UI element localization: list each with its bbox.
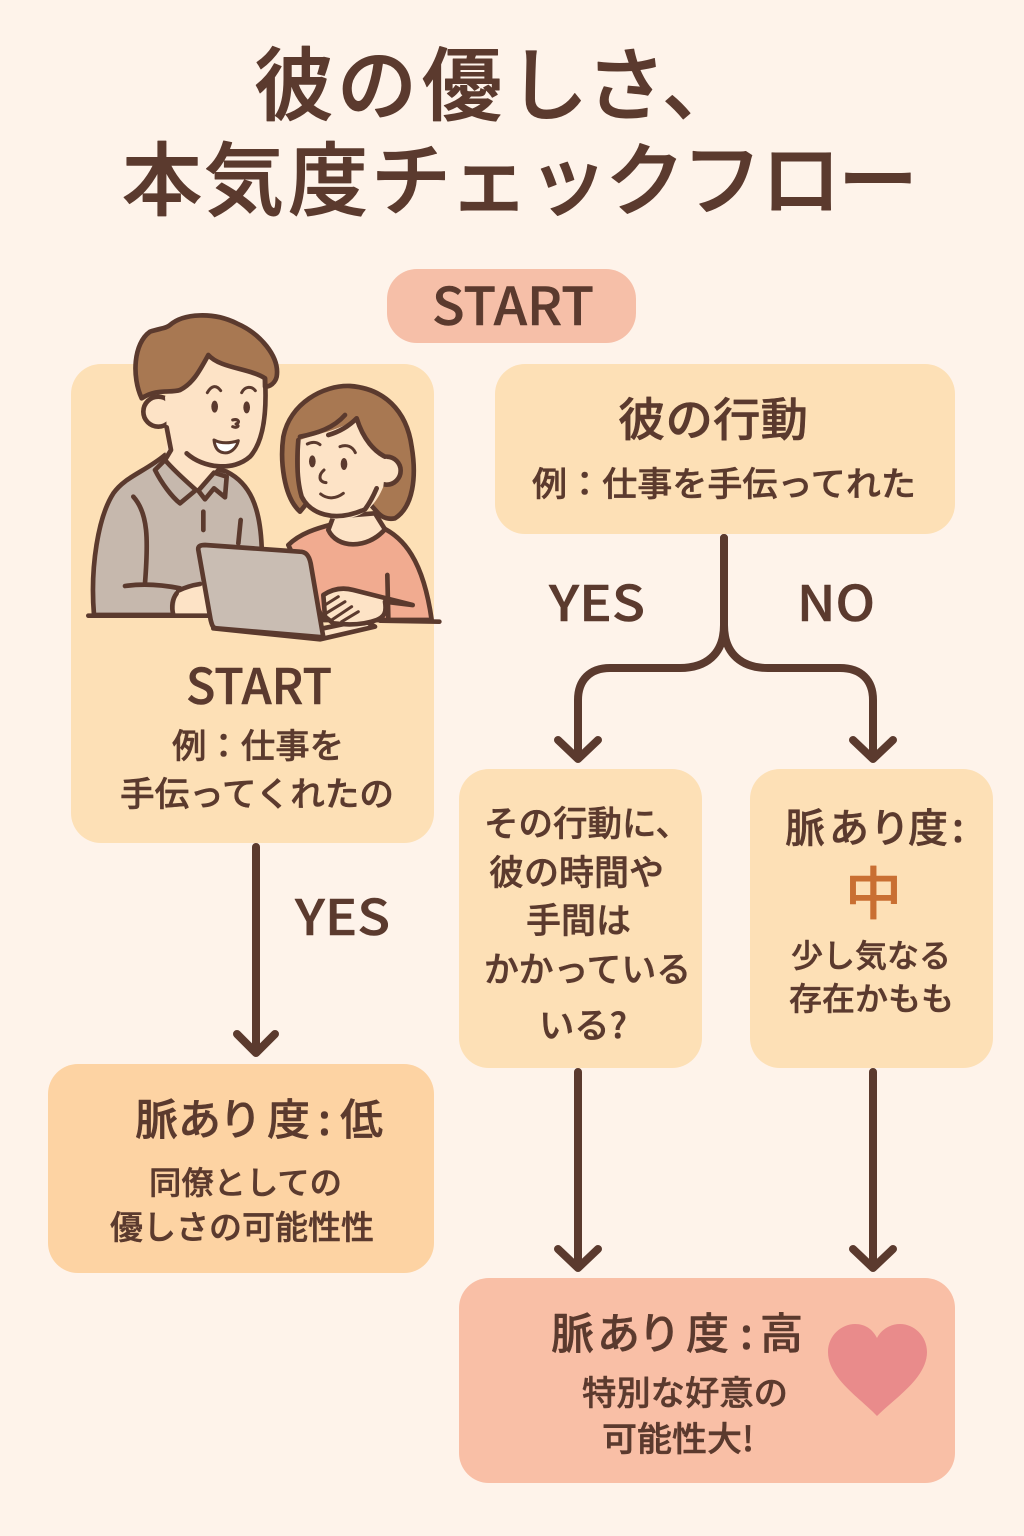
panel: low xyxy=(48,1064,434,1273)
label: no: NO xyxy=(797,565,875,636)
panel: high xyxy=(459,1278,955,1483)
label: left yes: YES xyxy=(294,879,390,950)
panel: left start box xyxy=(71,364,434,843)
woman face xyxy=(300,418,387,519)
left box label xyxy=(120,648,394,816)
title: 本気度チェックフロー xyxy=(122,117,918,233)
left box label: START xyxy=(186,648,332,719)
man face xyxy=(165,357,266,466)
woman body xyxy=(288,524,432,620)
left box label: 例：仕事を xyxy=(172,719,344,768)
left box label: 手伝ってくれたの xyxy=(120,767,394,816)
title xyxy=(122,22,918,233)
panel: low: 脈あり度:低 xyxy=(135,1086,383,1148)
label: yes: YES xyxy=(548,565,645,636)
woman neck xyxy=(328,513,385,544)
panel: question: かかっている xyxy=(484,942,691,993)
arrow: branch no xyxy=(724,538,893,759)
panel: medium: 脈あり度: xyxy=(785,796,964,854)
icon: heart xyxy=(828,1324,927,1416)
man ear xyxy=(143,397,173,427)
panel: question: いる? xyxy=(539,998,627,1049)
panel: medium: 中 xyxy=(845,849,902,931)
arrow: branch yes xyxy=(558,538,724,759)
man hair xyxy=(135,315,277,398)
woman hair back xyxy=(282,386,414,519)
panel: low: 同僚としての xyxy=(149,1158,342,1204)
panel: high: 脈あり度:高 xyxy=(551,1300,803,1362)
laptop xyxy=(198,545,375,639)
man collar and details xyxy=(125,378,266,615)
arrow: question down xyxy=(558,1072,598,1268)
arrow: medium down xyxy=(853,1072,893,1268)
man neck xyxy=(165,433,218,491)
panel: question xyxy=(459,769,702,1068)
panel: question: 手間は xyxy=(526,893,631,944)
panel: medium: 存在かもも xyxy=(789,974,954,1020)
title: 彼の優しさ、 xyxy=(254,22,742,138)
panel: high: 特別な好意の xyxy=(582,1366,788,1415)
woman ear xyxy=(373,457,401,485)
start pill: START xyxy=(432,265,594,340)
panel: high: 可能性大! xyxy=(602,1412,754,1461)
man body xyxy=(93,455,262,615)
woman hand xyxy=(323,589,413,624)
table line xyxy=(88,616,439,622)
start pill xyxy=(387,265,636,343)
panel: low: 優しさの可能性性 xyxy=(110,1201,374,1249)
panel: his action xyxy=(495,364,955,534)
panel: his action: 彼の行動 xyxy=(618,384,808,450)
panel: question: その行動に、 xyxy=(484,796,690,847)
panel: medium xyxy=(750,769,993,1068)
woman sleeve line xyxy=(387,575,388,618)
panel: medium: 少し気なる xyxy=(791,931,951,977)
illustration: couple at laptop xyxy=(88,315,439,639)
arrow: left yes xyxy=(237,847,275,1053)
panel: his action: 例：仕事を手伝ってれた xyxy=(532,457,916,506)
panel: question: 彼の時間や xyxy=(489,845,664,896)
